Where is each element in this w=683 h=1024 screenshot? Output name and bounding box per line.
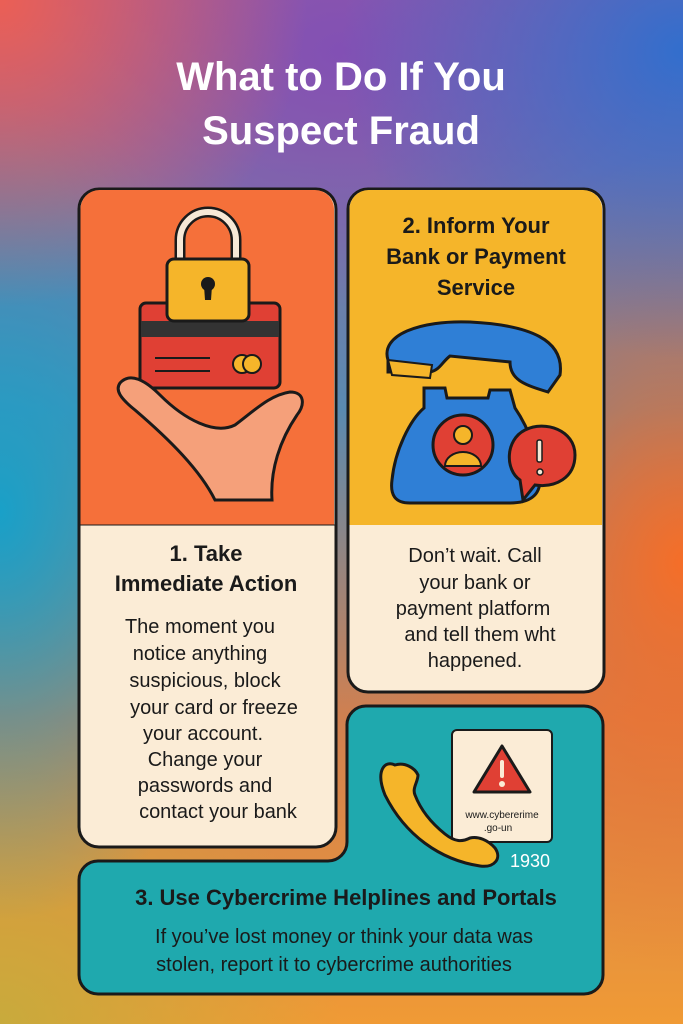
text block 1	[125, 616, 298, 823]
text block 3: If you’ve lost money or think your data was	[155, 926, 533, 948]
panel: cybercrime helplines	[79, 706, 603, 994]
panel: inform bank	[348, 189, 604, 692]
icon: phone handset	[381, 764, 498, 866]
heading 1: 1. Take	[170, 541, 242, 566]
text block 1: your card or freeze	[130, 697, 298, 719]
heading 2: Service	[437, 275, 515, 300]
text block 3	[155, 926, 533, 976]
text block 2: your bank or	[419, 572, 531, 594]
panel: take immediate action	[79, 189, 336, 847]
text block 1: your account.	[143, 723, 263, 745]
heading 3: 3. Use Cybercrime Helplines and Portals	[135, 885, 557, 910]
icon: telephone	[387, 322, 575, 503]
text block 3: stolen, report it to cybercrime authorities	[156, 954, 512, 976]
text block 1: Change your	[148, 749, 263, 771]
title: What to Do If You	[176, 55, 506, 99]
text block 2: Don’t wait. Call	[408, 545, 542, 567]
text block 1: contact your bank	[139, 801, 298, 823]
icon: warning sign card: www.cybererime	[464, 810, 539, 821]
icon: warning sign card: .go-un	[484, 823, 512, 834]
icon: warning sign card	[452, 730, 552, 842]
heading 1	[115, 541, 297, 596]
helpline number: 1930	[510, 851, 550, 871]
text block 2: happened.	[428, 650, 522, 672]
text block 1: notice anything	[133, 643, 267, 665]
text block 1: suspicious, block	[129, 670, 282, 692]
heading 2	[386, 213, 567, 300]
icon: lock card hand	[118, 212, 302, 500]
text block 2: and tell them wht	[404, 624, 556, 646]
heading 1: Immediate Action	[115, 571, 297, 596]
text block 1: passwords and	[138, 775, 272, 797]
heading 2: 2. Inform Your	[402, 213, 550, 238]
text block 2	[396, 545, 556, 672]
text block 1: The moment you	[125, 616, 275, 638]
text block 2: payment platform	[396, 598, 550, 620]
title: Suspect Fraud	[202, 109, 480, 153]
heading 2: Bank or Payment	[386, 244, 567, 269]
title	[176, 55, 506, 153]
